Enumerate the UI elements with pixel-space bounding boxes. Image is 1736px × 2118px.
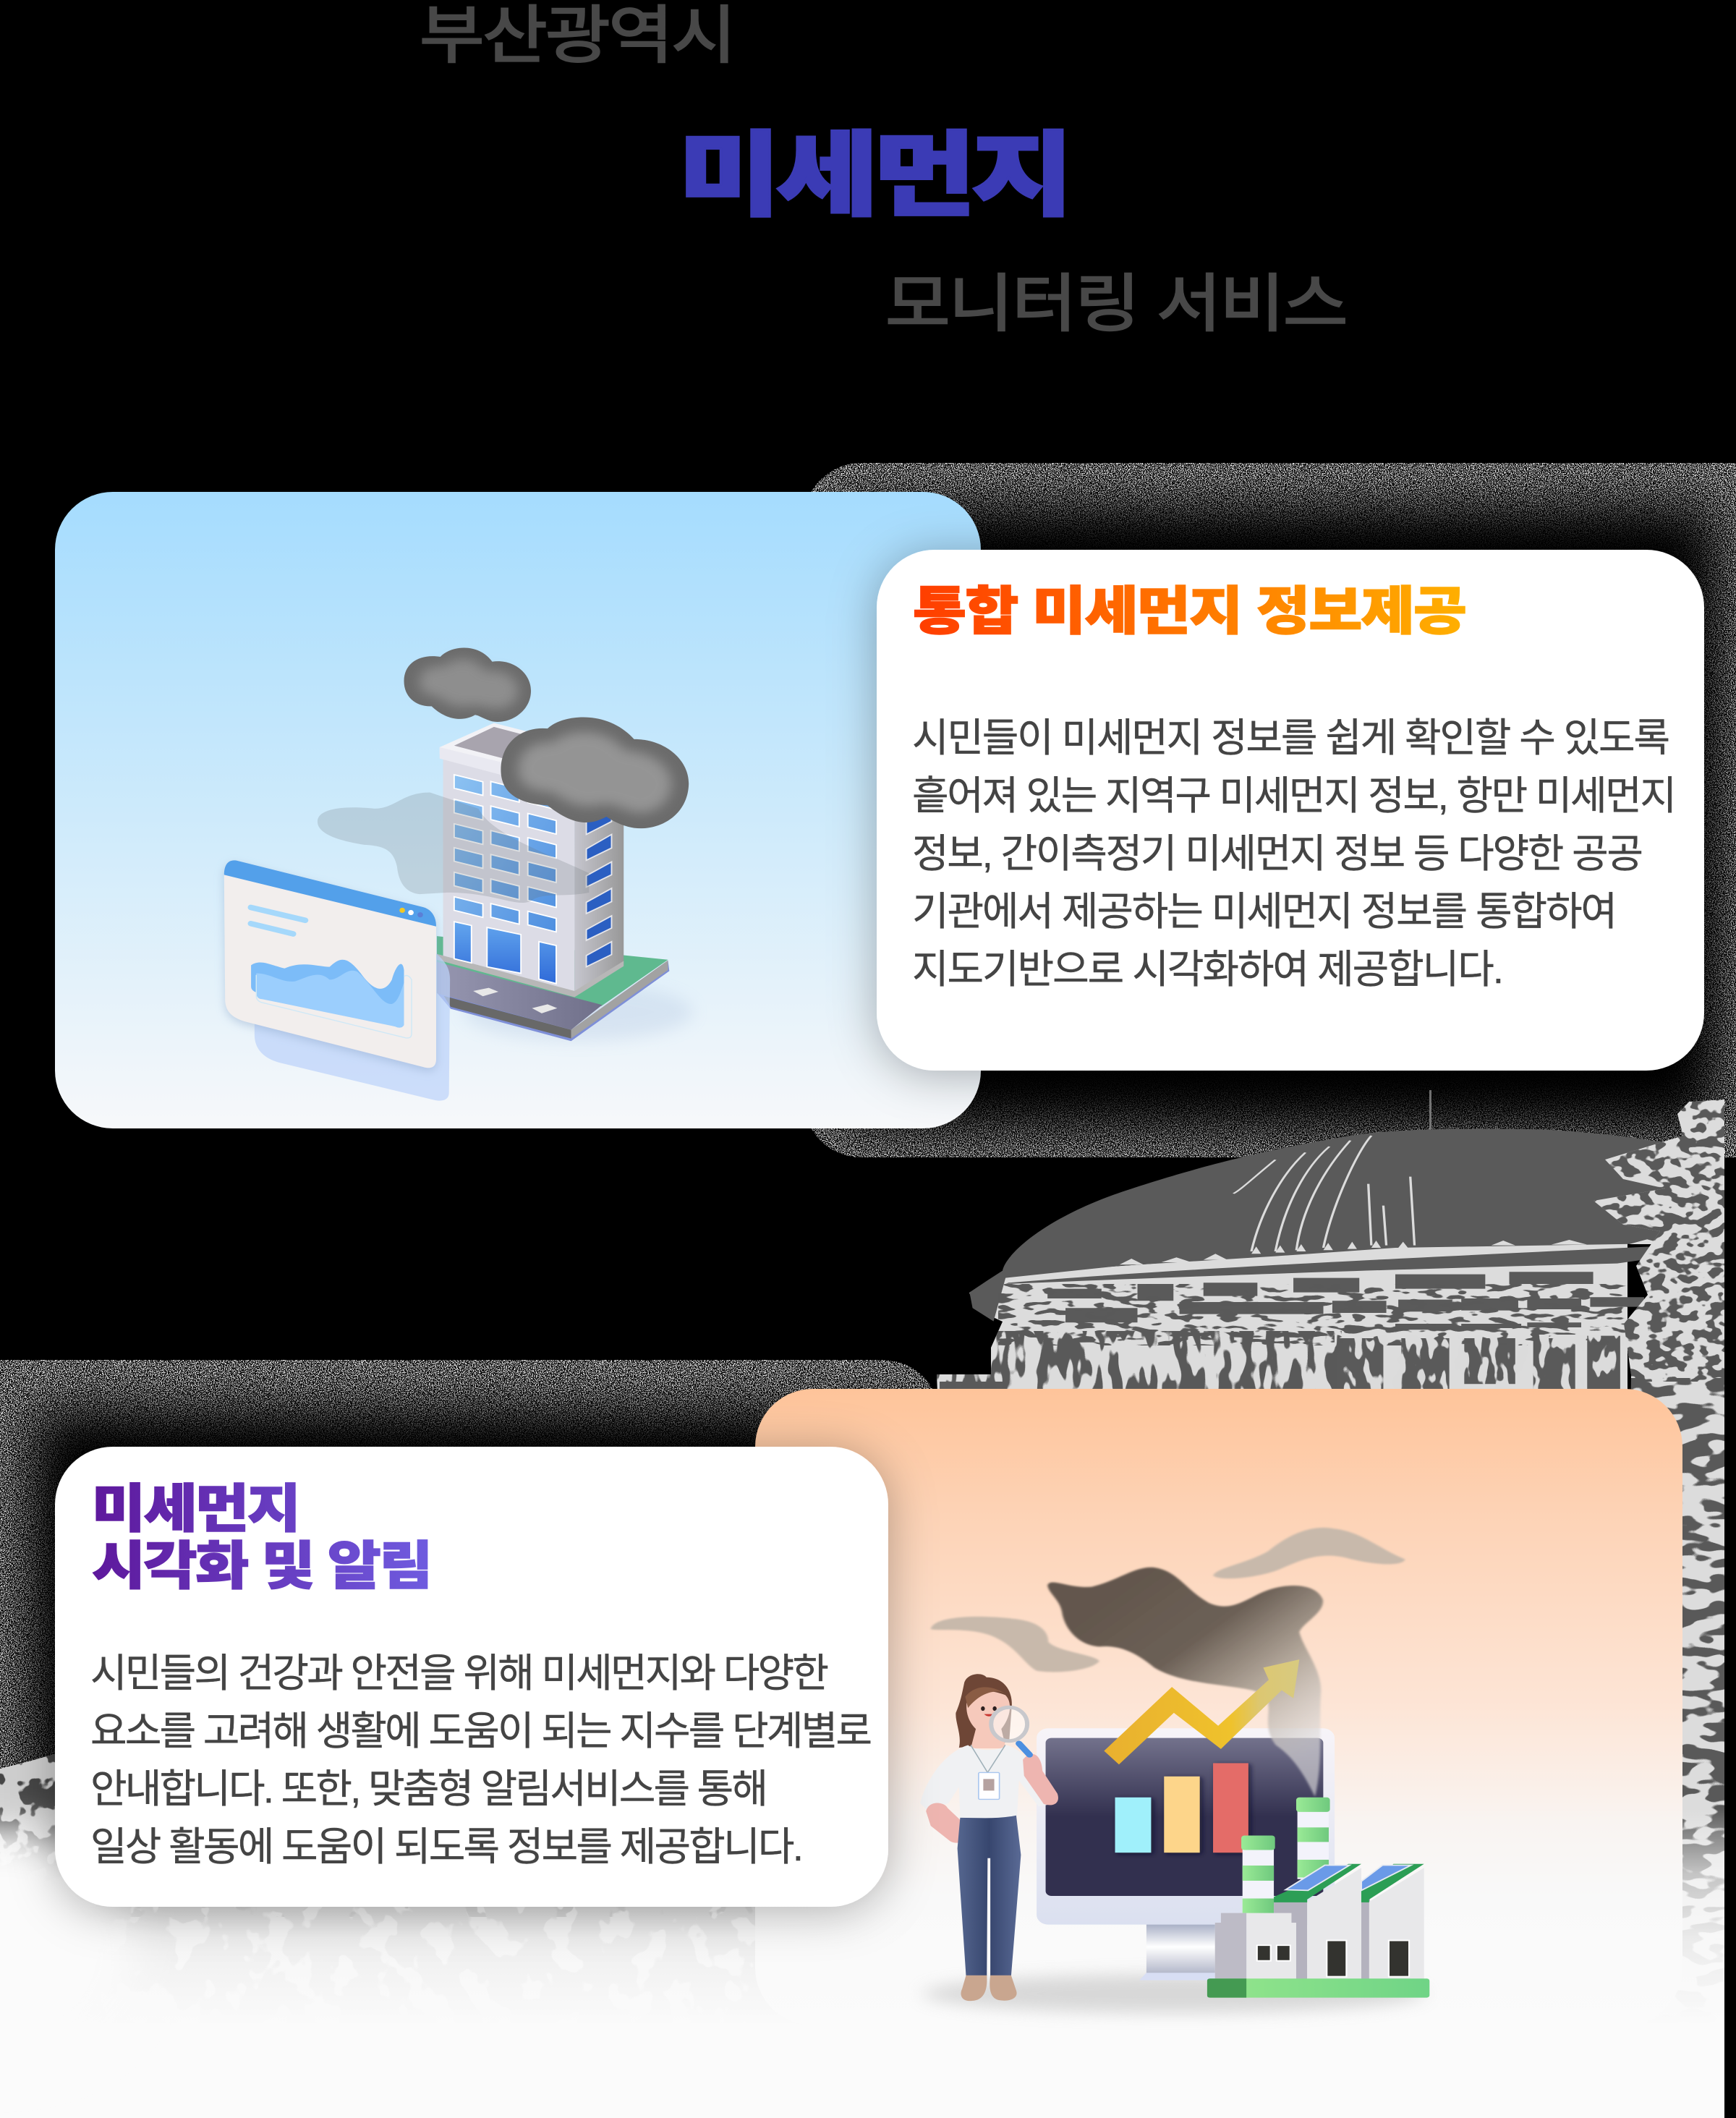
body text: 시민들의 건강과 안전을 위해 미세먼지와 다양한: [90, 1651, 829, 1696]
body text: 지도기반으로 시각화하여 제공합니다.: [912, 947, 1504, 992]
spire: [1429, 1090, 1431, 1130]
raised arm: [1023, 1754, 1058, 1805]
text placeholder lines: [251, 907, 305, 934]
building facade base: [937, 1230, 1628, 1447]
monitor: [1037, 1728, 1335, 1925]
title line: service: 모니터링 서비스: [885, 268, 1348, 339]
panel: integrated information text card: [877, 550, 1704, 1071]
bar chart: [1115, 1763, 1248, 1853]
trousers: [958, 1816, 1021, 1976]
woman with magnifying glass: [920, 1674, 1058, 2001]
shoes: [961, 1975, 1017, 2001]
dithered noise band behind first section: [796, 456, 1736, 1165]
magnifying glass: [991, 1707, 1029, 1755]
body text: [912, 715, 1677, 992]
large storm cloud: [501, 718, 689, 828]
lanyard and ID badge: [971, 1745, 1005, 1799]
panel: integrated information illustration card: [55, 492, 981, 1128]
smog plume: [318, 793, 589, 903]
ground platform: [437, 936, 669, 1041]
dark smoke plume: [1047, 1568, 1323, 1797]
dome roof: [940, 1128, 1695, 1389]
heading: 미세먼지: [92, 1481, 301, 1539]
side windows: [587, 808, 611, 967]
floor shadows: [923, 1974, 1425, 2013]
rising arrow: [1104, 1659, 1299, 1764]
body text: 요소를 고려해 생활에 도움이 되는 지수를 단계별로: [90, 1709, 872, 1753]
white fade at page bottom: [0, 1808, 1724, 2118]
title line: main keyword: 미세먼지: [678, 124, 1073, 227]
area chart: [251, 960, 412, 1038]
heading: 통합 미세먼지 정보제공: [913, 583, 1467, 641]
title line: city: 부산광역시: [420, 0, 736, 71]
body text: 시민들이 미세먼지 정보를 쉽게 확인할 수 있도록: [912, 715, 1670, 760]
blouse: [920, 1745, 1056, 1818]
facade texture: [937, 1284, 1628, 1447]
factory: [1207, 1798, 1429, 1998]
dark cornice and facade openings: [1005, 1246, 1677, 1284]
background illustration: lower building pattern: [0, 1754, 755, 1992]
dithered noise band behind second section: [0, 1360, 933, 1768]
tree and right edge blob texture: [1594, 1100, 1724, 1994]
green base: [1207, 1978, 1429, 1998]
illustration: analyst, monitor and factory: [920, 1528, 1429, 2013]
pale smoke wisp, left: [931, 1617, 1099, 1672]
window control dots: [399, 908, 423, 917]
body text: 일상 활동에 도움이 되도록 정보를 제공합니다.: [90, 1824, 804, 1869]
background illustration: domed assembly building: [937, 1090, 1729, 2118]
illustration: office building, clouds and dashboard: [224, 647, 693, 1101]
chimneys: [1241, 1798, 1330, 1916]
body text: 기관에서 제공하는 미세먼지 정보를 통합하여: [912, 889, 1617, 934]
solar panels: [1285, 1866, 1411, 1890]
body text: 안내합니다. 또한, 맞춤형 알림서비스를 통해: [90, 1766, 768, 1811]
small storm cloud: [404, 647, 531, 722]
doors: [454, 922, 556, 984]
black strip on right edge: [1724, 1157, 1736, 2118]
windows: [454, 775, 556, 932]
body text: [90, 1651, 872, 1869]
eyes and mouth: [981, 1706, 997, 1711]
body text: 정보, 간이측정기 미세먼지 정보 등 다양한 공공: [912, 831, 1643, 876]
office building: [437, 723, 627, 998]
hair and ponytail: [956, 1674, 1012, 1748]
heading: [92, 1481, 433, 1596]
monitor stand: [1139, 1924, 1221, 1980]
face and neck: [966, 1691, 1010, 1748]
title block: [420, 0, 1348, 339]
lowered arm and hand: [926, 1803, 969, 1843]
panel: visualization and alert text card: [55, 1447, 888, 1907]
panel: visualization and alert illustration card: [755, 1389, 1682, 2025]
translucent glass panel: [255, 954, 450, 1101]
browser dashboard window: [224, 860, 436, 1068]
heading: 시각화 및 알림: [92, 1538, 433, 1596]
body text: 흩어져 있는 지역구 미세먼지 정보, 항만 미세먼지: [912, 773, 1677, 818]
window title bar: [224, 860, 436, 927]
ground shadow: [464, 983, 693, 1041]
pale smoke wisp, upper right: [1213, 1528, 1405, 1578]
factory halls: [1274, 1897, 1370, 1979]
office block: [1215, 1913, 1296, 1979]
